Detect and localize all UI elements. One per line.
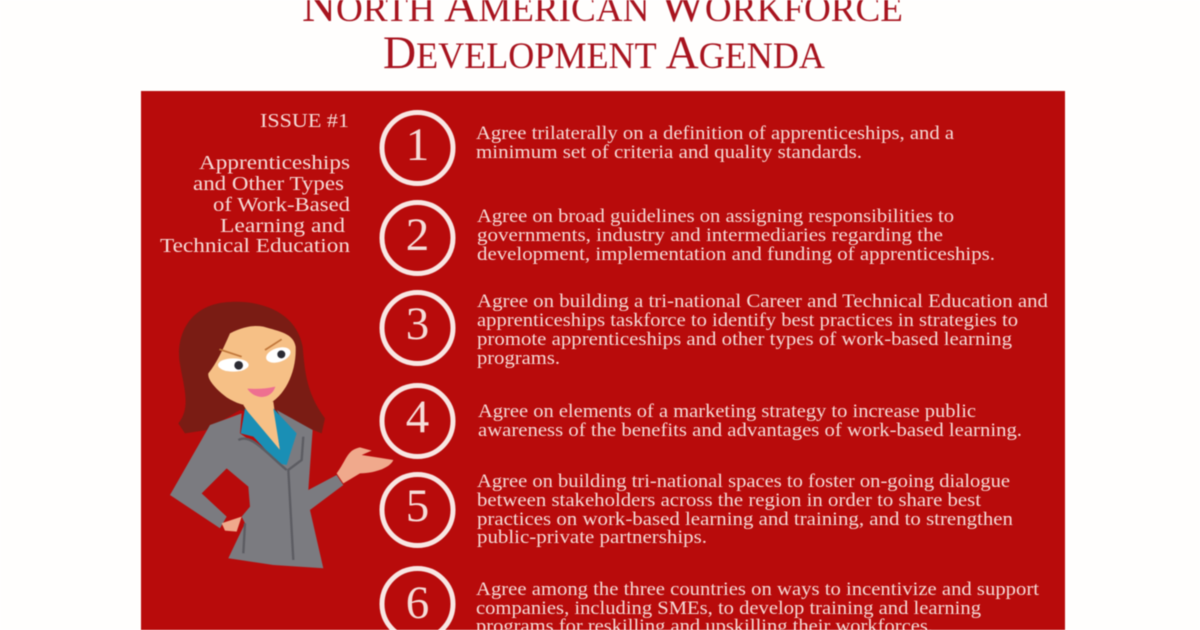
item 2: Agree on broad guidelines on assigning responsibilities to xyxy=(477,206,954,227)
item 2 xyxy=(382,202,995,274)
item 4: Agree on elements of a marketing strategy to increase public xyxy=(478,401,976,422)
number badge 1 xyxy=(382,112,453,184)
panel: red background xyxy=(141,91,1065,630)
item 5: 5 xyxy=(406,480,429,532)
title: DEVELOPMENT AGENDA xyxy=(383,27,825,79)
item 4: 4 xyxy=(406,391,429,443)
text block: issue title xyxy=(160,152,350,257)
item 5 xyxy=(382,471,1014,548)
text block: issue title: and Other Types xyxy=(193,173,344,195)
item 2: development, implementation and funding of apprenticeships. xyxy=(477,244,995,265)
item 4 xyxy=(382,386,1022,456)
heading: issue label: ISSUE #1 xyxy=(260,110,349,132)
item 3: 3 xyxy=(406,298,429,350)
icon: businesswoman presenting xyxy=(170,302,393,568)
item 3: programs. xyxy=(477,348,560,369)
item 5: public-private partnerships. xyxy=(477,527,707,548)
item 6: companies, including SMEs, to develop training and learning xyxy=(476,598,982,619)
item 1 xyxy=(382,112,955,184)
number badge 6 xyxy=(382,568,453,630)
item 6 xyxy=(382,568,1040,630)
item 6: 6 xyxy=(406,577,429,629)
item 5: between stakeholders across the region in order to share best xyxy=(477,490,982,511)
item 1: 1 xyxy=(406,119,429,171)
number badge 5 xyxy=(382,474,453,546)
item 3: apprenticeships taskforce to identify best practices in strategies to xyxy=(477,310,1018,331)
text block: issue title: of Work-Based xyxy=(213,194,350,216)
item 2: 2 xyxy=(406,209,429,261)
item 3 xyxy=(382,291,1049,369)
number badge 4 xyxy=(382,386,453,456)
number badge 3 xyxy=(382,292,453,364)
item 5: Agree on building tri-national spaces to foster on-going dialogue xyxy=(477,471,1010,492)
item 4: awareness of the benefits and advantages of work-based learning. xyxy=(478,420,1022,441)
item 3: Agree on building a tri-national Career and Technical Education and xyxy=(477,291,1049,312)
text block: issue title: Learning and xyxy=(220,215,345,237)
item 3: promote apprenticeships and other types of work-based learning xyxy=(477,329,1013,350)
title xyxy=(302,0,903,79)
text block: issue title: Technical Education xyxy=(160,235,350,257)
number badge 2 xyxy=(382,202,453,274)
text block: issue title: Apprenticeships xyxy=(199,152,350,174)
item 1: Agree trilaterally on a definition of apprenticeships, and a xyxy=(476,123,955,144)
item 1: minimum set of criteria and quality standards. xyxy=(476,142,862,163)
item 5: practices on work-based learning and training, and to strengthen xyxy=(477,509,1014,530)
item 6: Agree among the three countries on ways to incentivize and support xyxy=(476,579,1040,600)
item 2: governments, industry and intermediaries regarding the xyxy=(477,225,943,246)
